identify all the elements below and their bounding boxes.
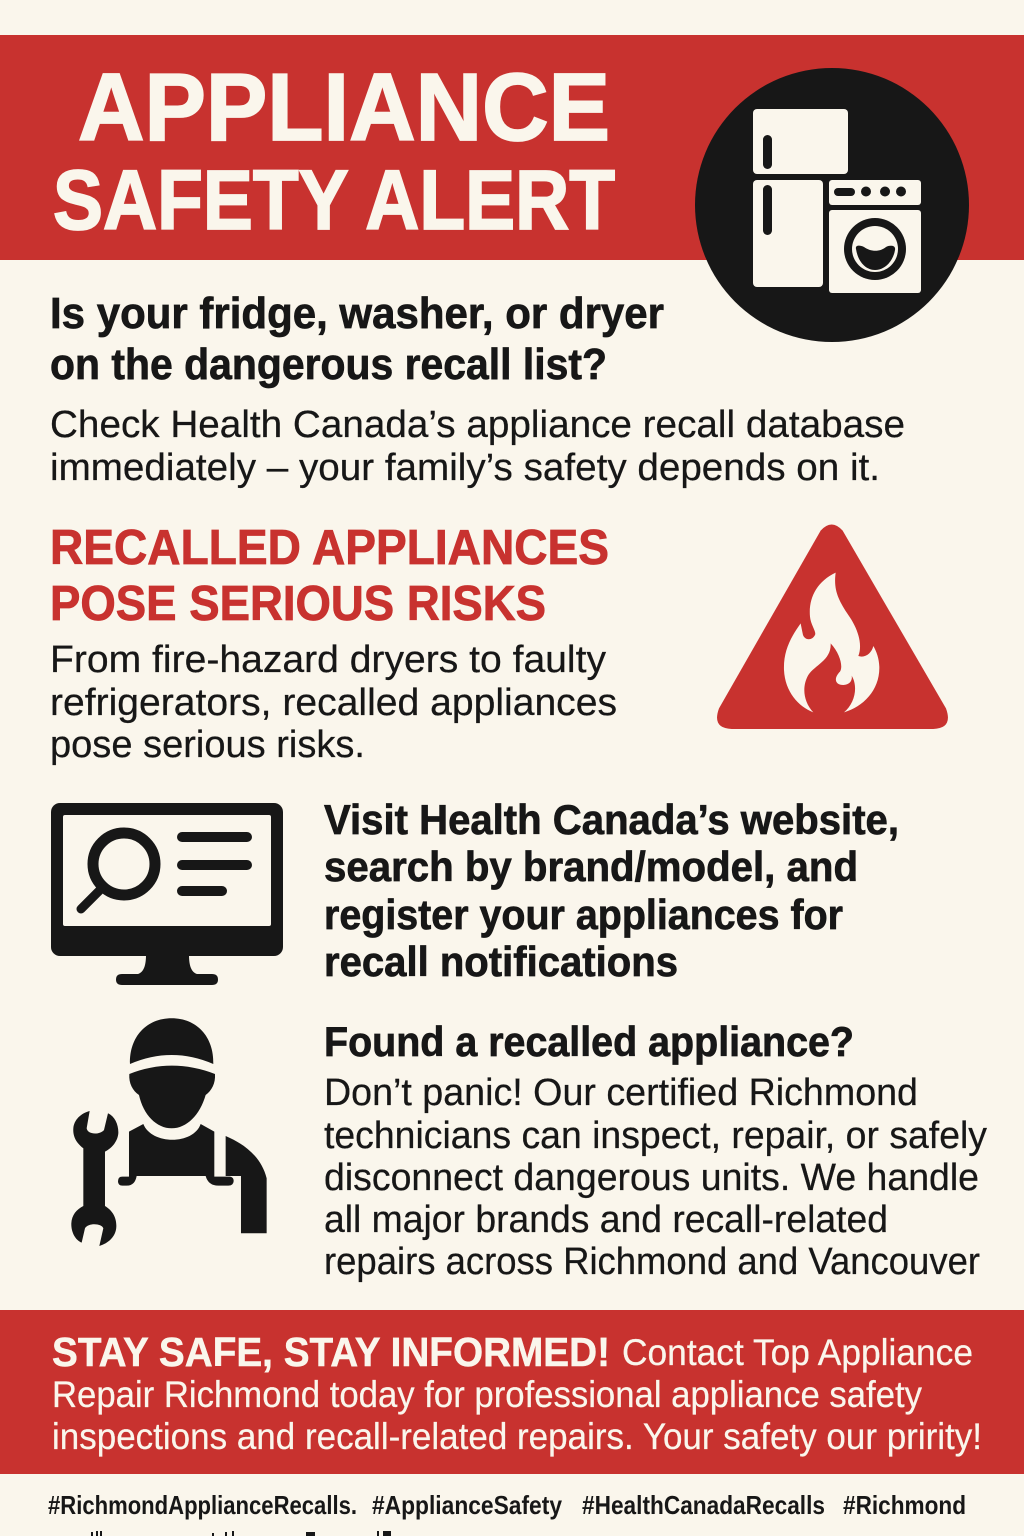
- hashtags: #RichmondApplianceRecalls.: [48, 1490, 357, 1520]
- text block: technicians description: technicians can inspect, repair, or safely: [324, 1115, 987, 1157]
- panel: header banner: [0, 35, 1024, 260]
- panel: call to action banner: inspections and recall-related repairs. Your safety our pririty!: [52, 1416, 982, 1457]
- text block: technicians description: [324, 1072, 987, 1283]
- heading: serious risks: RECALLED APPLIANCES: [50, 521, 609, 575]
- title: [53, 54, 615, 247]
- icon: fire warning triangle: [717, 524, 948, 729]
- text block: visit website: register your appliances for: [324, 891, 843, 938]
- text block: visit website: [324, 796, 899, 985]
- text block: visit website: search by brand/model, and: [324, 843, 858, 890]
- heading: recall list question: on the dangerous recall list?: [50, 340, 607, 389]
- text block: risks description: From fire-hazard dryers to faulty: [50, 639, 606, 681]
- hashtags: [48, 1490, 966, 1520]
- text block: check database: Check Health Canada’s appliance recall database: [50, 404, 905, 446]
- heading: recall list question: Is your fridge, washer, or dryer: [50, 289, 664, 338]
- text block: risks description: [50, 639, 617, 766]
- icon: technician with wrench: [71, 1018, 267, 1246]
- heading: serious risks: [50, 521, 609, 631]
- icon: computer monitor with search: [51, 803, 283, 985]
- hashtags: #ApplianceSafety: [372, 1490, 562, 1520]
- text block: visit website: Visit Health Canada’s website,: [324, 796, 899, 843]
- icon: fridge and washer in black circle: [695, 68, 969, 342]
- text block: technicians description: repairs across Richmond and Vancouver: [324, 1241, 980, 1283]
- text block: visit website: recall notifications: [324, 938, 678, 985]
- panel: call to action banner: [0, 1310, 1024, 1474]
- heading: found a recalled appliance: Found a recalled appliance?: [324, 1018, 854, 1065]
- panel: call to action banner: STAY SAFE, STAY INFORMED!: [52, 1329, 610, 1375]
- title: APPLIANCE: [78, 54, 610, 161]
- hashtags: #Richmond: [843, 1490, 966, 1520]
- text block: technicians description: disconnect dangerous units. We handle: [324, 1157, 979, 1199]
- heading: serious risks: POSE SERIOUS RISKS: [50, 577, 546, 631]
- title: SAFETY ALERT: [53, 153, 615, 247]
- panel: call to action banner: Repair Richmond today for professional appliance safety: [52, 1374, 922, 1415]
- text block: technicians description: all major brands and recall-related: [324, 1199, 888, 1241]
- heading: recall list question: [50, 289, 664, 389]
- panel: call to action banner: Contact Top Appliance: [622, 1332, 973, 1373]
- text block: risks description: refrigerators, recalled appliances: [50, 682, 617, 724]
- text block: check database: [50, 404, 905, 489]
- text block: risks description: pose serious risks.: [50, 724, 365, 766]
- text block: check database: immediately – your family’s safety depends on it.: [50, 447, 880, 489]
- text block: technicians description: Don’t panic! Our certified Richmond: [324, 1072, 918, 1114]
- hashtags: #HealthCanadaRecalls: [582, 1490, 825, 1520]
